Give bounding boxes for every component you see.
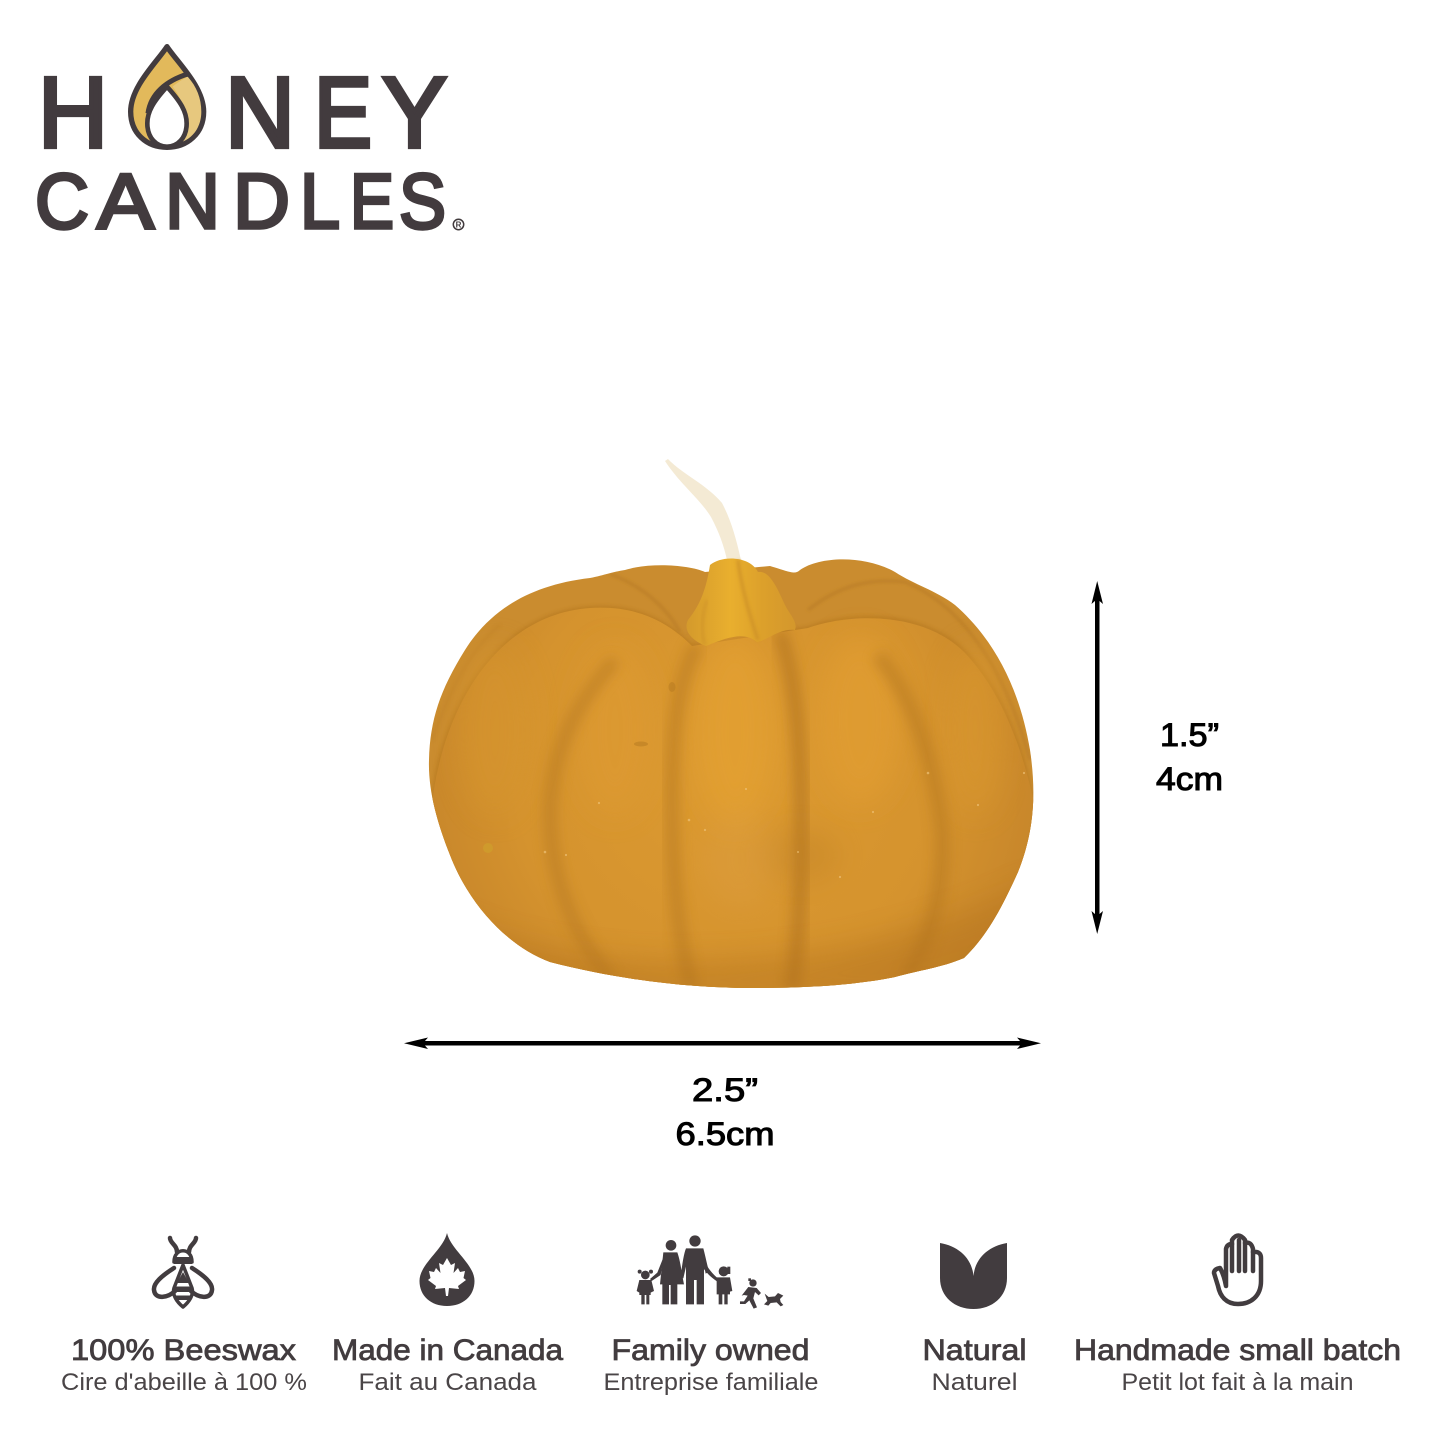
width label: 2.5” <box>692 1072 758 1108</box>
registered mark: R <box>456 220 462 230</box>
feature: Family owned <box>604 1235 818 1396</box>
feature: 100% Beeswax <box>61 1238 307 1396</box>
logo word: Candles: E <box>350 157 394 245</box>
label: Cire d'abeille: Cire d'abeille à 100 % <box>61 1369 307 1396</box>
label: Natural: Natural <box>922 1334 1026 1367</box>
logo word: Candles: A <box>97 157 154 245</box>
logo word: Candles: L <box>300 157 340 245</box>
width dimension arrow <box>404 1038 1041 1049</box>
height label: 4cm <box>1156 761 1223 797</box>
icon: family with dog <box>637 1235 783 1309</box>
label: Made in Canada: Made in Canada <box>332 1334 563 1367</box>
icon: hand <box>1214 1236 1261 1304</box>
logo word: Honey: E <box>314 57 372 169</box>
label: Petit lot: Petit lot fait à la main <box>1122 1369 1354 1396</box>
feature: Natural <box>922 1243 1026 1396</box>
back lobe separators <box>610 572 676 624</box>
logo word: Candles: D <box>233 157 290 245</box>
pumpkin body <box>420 550 1045 1000</box>
label: Family owned: Family owned <box>612 1334 810 1367</box>
pumpkin candle photo <box>420 459 1045 1000</box>
height label <box>1156 717 1223 797</box>
logo word: Candles: S <box>399 157 446 245</box>
wick <box>665 459 741 560</box>
icon: bee <box>154 1238 212 1307</box>
registered mark <box>453 219 464 230</box>
width label <box>676 1072 774 1152</box>
lobe highlights <box>718 636 750 708</box>
back lobes <box>420 550 1045 1000</box>
pumpkin stem <box>686 559 796 646</box>
label: Naturel: Naturel <box>932 1369 1018 1396</box>
wax blemishes <box>634 682 676 746</box>
logo word: Candles: C <box>35 157 89 245</box>
logo word: Honey: Y <box>382 57 447 169</box>
bottom shade <box>526 906 1002 988</box>
height dimension arrow <box>1092 581 1103 934</box>
label: Entreprise familiale: Entreprise familiale <box>604 1369 818 1396</box>
height label: 1.5” <box>1160 717 1219 753</box>
soft dark patch <box>782 843 822 866</box>
logo word: Candles: N <box>165 157 220 245</box>
logo word: Honey: H <box>38 57 108 169</box>
label: Fait au Canada: Fait au Canada <box>358 1369 537 1396</box>
logo word: Honey <box>38 57 447 169</box>
width label: 6.5cm <box>676 1116 774 1152</box>
logo word: Candles <box>35 157 446 245</box>
icon: tulip leaf <box>940 1243 1007 1309</box>
wax speckles <box>544 772 1025 878</box>
logo icon: honey flame drop <box>131 47 204 147</box>
logo: Honey Candles <box>35 47 464 245</box>
label: 100% Beeswax: 100% Beeswax <box>71 1334 296 1367</box>
label: Handmade small batch: Handmade small batch <box>1074 1334 1401 1367</box>
lobe grooves <box>550 660 615 978</box>
feature: Made in Canada <box>332 1233 563 1396</box>
icon: maple drop <box>420 1233 474 1306</box>
logo word: Honey: N <box>225 57 295 169</box>
front lobes <box>428 606 1036 1000</box>
feature: Handmade small batch <box>1074 1236 1401 1396</box>
